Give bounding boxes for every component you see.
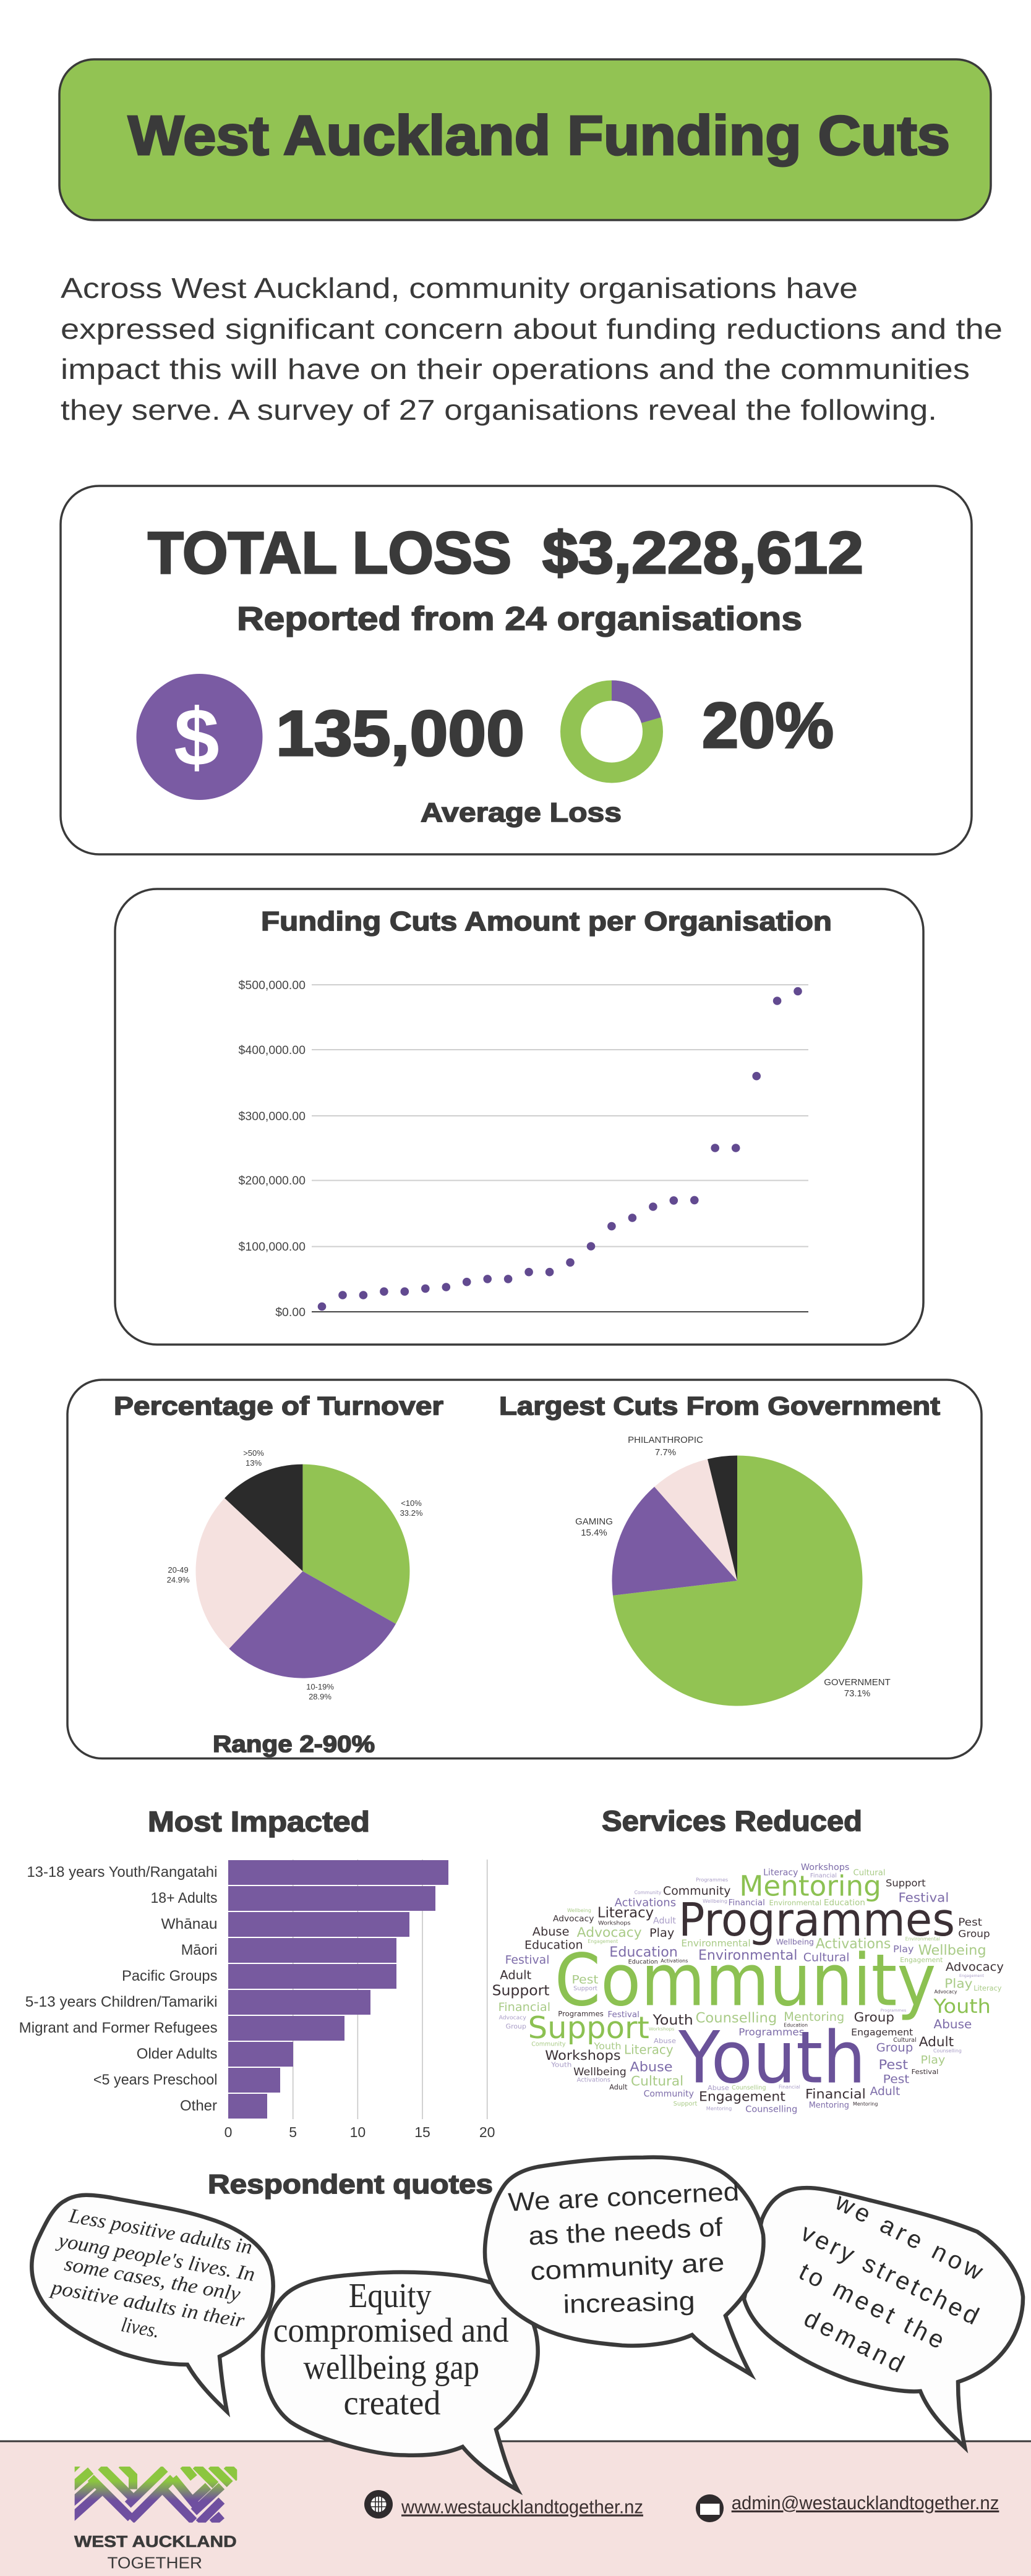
word cloud: services reduced: Youth: [652, 2013, 693, 2028]
word cloud: services reduced: Financial: [729, 1898, 765, 1908]
word cloud: services reduced: Festival: [505, 1954, 549, 1967]
reported from caption: Reported from 24 organisations: [237, 600, 802, 637]
bar chart: most impacted: 10: [350, 2124, 366, 2140]
word cloud: services reduced: Support: [528, 2010, 649, 2046]
pie chart: percentage of turnover: >50%: [243, 1448, 264, 1458]
speech bubble: very stretched: demand: [800, 2305, 909, 2378]
pie chart: largest cuts: GAMING: [575, 1516, 613, 1527]
word cloud: services reduced: Adult: [500, 1968, 532, 1982]
word cloud: services reduced: Education: [824, 1898, 865, 1908]
logo: West Auckland Together: TOGETHER: [108, 2553, 202, 2572]
word cloud: services reduced: Engagement: [959, 1974, 984, 1978]
panel: funding cuts scatter chart: [115, 889, 923, 1345]
word cloud: services reduced: Group: [876, 2041, 913, 2054]
pie chart: percentage of turnover: 24.9%: [167, 1575, 190, 1584]
word cloud: services reduced: Financial: [805, 2086, 866, 2102]
bar chart: most impacted: 5-13 years Children/Tamariki: [25, 1994, 218, 2010]
word cloud: services reduced: Environmental: [698, 1948, 797, 1963]
word cloud: services reduced: Counselling: [745, 2105, 797, 2115]
title banner: [59, 59, 991, 220]
word cloud: services reduced: Mentoring: [809, 2101, 849, 2110]
speech bubble: equity compromised: wellbeing gap: [303, 2349, 479, 2387]
word cloud: services reduced: Cultural: [803, 1951, 850, 1965]
word cloud: services reduced: Support: [492, 1983, 549, 1999]
email link: admin@westaucklandtogether.nz: [732, 2492, 999, 2514]
intro paragraph: expressed significant concern about funding reductions and the: [61, 313, 1003, 345]
word cloud: services reduced: Abuse: [533, 1926, 569, 1939]
website link: www.westaucklandtogether.nz: [401, 2496, 643, 2517]
word cloud: services reduced: Wellbeing: [567, 1908, 591, 1913]
bar chart: most impacted: 15: [414, 2124, 430, 2140]
average loss caption: Average Loss: [421, 797, 622, 828]
pie chart: percentage of turnover: [167, 1448, 423, 1701]
bar chart: most impacted: Whānau: [161, 1916, 218, 1932]
word cloud: services reduced: Literacy: [624, 2043, 674, 2057]
word cloud: services reduced: Engagement: [588, 1939, 618, 1944]
heading: most impacted: Most Impacted: [148, 1805, 370, 1837]
speech bubble: very stretched: [744, 2188, 1023, 2447]
word cloud: services reduced: Engagement: [851, 2026, 913, 2038]
word cloud: services reduced: [492, 1863, 1004, 2115]
range caption: Range 2-90%: [213, 1732, 375, 1758]
word cloud: services reduced: Environmental: [905, 1936, 940, 1942]
word cloud: services reduced: Mentoring: [706, 2106, 732, 2112]
word cloud: services reduced: Advocacy: [946, 1960, 1004, 1974]
word cloud: services reduced: Programmes: [881, 2008, 907, 2013]
word cloud: services reduced: Advocacy: [935, 1989, 957, 1994]
word cloud: services reduced: Activations: [661, 1958, 688, 1963]
word cloud: services reduced: Literacy: [973, 1984, 1002, 1992]
bar chart: most impacted: Pacific Groups: [122, 1968, 218, 1984]
pie chart: largest cuts: 15.4%: [581, 1528, 607, 1538]
word cloud: services reduced: Festival: [607, 2010, 640, 2020]
bar chart: most impacted: 0: [225, 2124, 232, 2140]
word cloud: services reduced: Activations: [816, 1937, 891, 1952]
word cloud: services reduced: Wellbeing: [776, 1938, 814, 1947]
speech bubble: less positive adults: [32, 2195, 273, 2412]
word cloud: services reduced: Programmes: [678, 1894, 955, 1947]
word cloud: services reduced: Play: [920, 2054, 946, 2067]
intro paragraph: Across West Auckland, community organisations have: [61, 272, 858, 304]
icon: dollar coin: $: [174, 692, 220, 783]
word cloud: services reduced: Advocacy: [577, 1925, 642, 1941]
footer band: [0, 2441, 1031, 2576]
panel: pie charts: [67, 1380, 982, 1758]
word cloud: services reduced: Education: [524, 1939, 583, 1952]
speech bubble: very stretched: very stretched: [797, 2219, 983, 2330]
icon: dollar coin: [136, 674, 262, 800]
speech bubble: very stretched: to meet the: [795, 2258, 949, 2354]
word cloud: services reduced: Literacy: [763, 1868, 798, 1878]
percent value: 20%: [702, 690, 834, 762]
total loss amount: $3,228,612: [542, 520, 863, 586]
word cloud: services reduced: Group: [958, 1928, 990, 1940]
word cloud: services reduced: Support: [886, 1877, 926, 1889]
word cloud: services reduced: Support: [573, 1986, 597, 1992]
speech bubble: equity compromised: Equity: [349, 2277, 432, 2315]
word cloud: services reduced: Abuse: [708, 2084, 729, 2092]
pie chart: largest cuts: PHILANTHROPIC: [628, 1435, 703, 1445]
word cloud: services reduced: Wellbeing: [918, 1943, 986, 1958]
word cloud: services reduced: Literacy: [597, 1905, 654, 1921]
chart heading: Funding Cuts Amount per Organisation: [261, 906, 832, 937]
intro paragraph: impact this will have on their operations and the communities: [61, 353, 970, 385]
word cloud: services reduced: Environmental: [681, 1937, 751, 1949]
word cloud: services reduced: Advocacy: [499, 2015, 526, 2021]
scatter points: [318, 987, 802, 1311]
word cloud: services reduced: Workshops: [801, 1863, 849, 1872]
word cloud: services reduced: Activations: [577, 2077, 610, 2084]
word cloud: services reduced: Education: [784, 2022, 808, 2028]
word cloud: services reduced: Adult: [870, 2085, 900, 2098]
word cloud: services reduced: Financial: [498, 2001, 550, 2014]
word cloud: services reduced: Pest: [958, 1916, 982, 1929]
pie chart: percentage of turnover: 28.9%: [309, 1692, 332, 1701]
word cloud: services reduced: Advocacy: [553, 1915, 594, 1924]
speech bubble: less positive adults: some cases, the only: [62, 2253, 242, 2306]
word cloud: services reduced: Cultural: [631, 2074, 683, 2089]
word cloud: services reduced: Youth: [678, 2016, 866, 2099]
word cloud: services reduced: Youth: [550, 2060, 571, 2068]
y axis and gridlines: $200,000.00: [239, 1174, 306, 1188]
pie chart: largest cuts: 73.1%: [844, 1688, 870, 1699]
word cloud: services reduced: Abuse: [630, 2060, 673, 2075]
word cloud: services reduced: Counselling: [696, 2010, 777, 2026]
word cloud: services reduced: Community: [555, 1939, 936, 2022]
word cloud: services reduced: Pest: [878, 2057, 908, 2072]
speech bubble: less positive adults: positive adults in their: [48, 2276, 246, 2332]
bar chart: most impacted: Other: [180, 2098, 217, 2114]
word cloud: services reduced: Workshops: [649, 2026, 675, 2031]
word cloud: services reduced: Pest: [571, 1973, 599, 1986]
speech bubble: equity compromised: created: [344, 2384, 440, 2423]
panel: total loss: [61, 486, 972, 854]
bar chart: most impacted: Older Adults: [137, 2046, 218, 2062]
word cloud: services reduced: Festival: [912, 2068, 938, 2076]
word cloud: services reduced: Activations: [615, 1897, 676, 1909]
y axis and gridlines: $100,000.00: [239, 1240, 306, 1254]
word cloud: services reduced: Group: [854, 2010, 894, 2025]
speech bubble: less positive adults: lives.: [119, 2314, 161, 2342]
speech bubble: very stretched: we are now: [831, 2188, 987, 2285]
word cloud: services reduced: Pest: [883, 2073, 909, 2086]
word cloud: services reduced: Engagement: [699, 2089, 785, 2105]
word cloud: services reduced: Cultural: [893, 2037, 917, 2044]
heading: percentage of turnover: Percentage of Turnover: [114, 1391, 443, 1421]
icon: globe: [364, 2490, 393, 2519]
word cloud: services reduced: Festival: [898, 1890, 949, 1905]
heading: respondent quotes: Respondent quotes: [208, 2169, 493, 2200]
word cloud: services reduced: Programmes: [738, 2026, 804, 2038]
word cloud: services reduced: Mentoring: [739, 1870, 881, 1903]
word cloud: services reduced: Adult: [919, 2034, 954, 2050]
word cloud: services reduced: Community: [635, 1890, 662, 1895]
word cloud: services reduced: Play: [649, 1927, 675, 1940]
bar chart: most impacted: <5 years Preschool: [93, 2072, 218, 2088]
average loss value: 135,000: [276, 698, 524, 770]
y axis and gridlines: $500,000.00: [239, 979, 306, 992]
intro paragraph: they serve. A survey of 27 organisations reveal the following.: [61, 394, 937, 426]
pie chart: percentage of turnover: 20-49: [168, 1565, 189, 1575]
total loss heading: TOTAL LOSS: [148, 520, 511, 586]
pie chart: percentage of turnover: <10%: [401, 1498, 422, 1508]
bar chart: most impacted: 20: [479, 2124, 495, 2140]
word cloud: services reduced: Programmes: [558, 2010, 604, 2018]
word cloud: services reduced: Environmental: [769, 1898, 821, 1907]
logo mark: [74, 2467, 237, 2523]
y axis and gridlines: $0.00: [275, 1306, 306, 1319]
word cloud: services reduced: Community: [531, 2041, 566, 2047]
intro paragraph: [61, 272, 1003, 426]
heading: services reduced: Services Reduced: [602, 1805, 862, 1837]
word cloud: services reduced: Support: [674, 2101, 698, 2107]
word cloud: services reduced: Engagement: [900, 1956, 943, 1964]
word cloud: services reduced: Abuse: [934, 2017, 972, 2031]
title banner: West Auckland Funding Cuts: [128, 105, 950, 167]
word cloud: services reduced: Mentoring: [853, 2101, 878, 2107]
pie chart: largest cuts: [575, 1435, 891, 1706]
pie chart: largest cuts: GOVERNMENT: [824, 1677, 891, 1688]
word cloud: services reduced: Financial: [810, 1872, 837, 1879]
bar chart: most impacted: 13-18 years Youth/Rangatahi: [27, 1864, 217, 1881]
word cloud: services reduced: Play: [893, 1944, 914, 1955]
word cloud: services reduced: Adult: [653, 1916, 676, 1926]
bar chart: most impacted: 18+ Adults: [151, 1890, 218, 1906]
word cloud: services reduced: Financial: [779, 2084, 800, 2089]
word cloud: services reduced: Workshops: [598, 1920, 631, 1926]
y axis and gridlines: $400,000.00: [239, 1044, 306, 1057]
word cloud: services reduced: Abuse: [654, 2037, 676, 2045]
bar chart: most impacted: 5: [289, 2124, 297, 2140]
speech bubble: we are concerned: We are concerned: [507, 2177, 740, 2217]
speech bubble: we are concerned: [485, 2157, 764, 2374]
word cloud: services reduced: Play: [944, 1976, 972, 1991]
word cloud: services reduced: Programmes: [696, 1877, 728, 1883]
word cloud: services reduced: Group: [506, 2023, 526, 2031]
pie chart: largest cuts: 7.7%: [655, 1447, 676, 1458]
icon: mail: [696, 2494, 724, 2522]
speech bubble: equity compromised: compromised and: [273, 2311, 509, 2350]
word cloud: services reduced: Youth: [593, 2041, 622, 2052]
logo: West Auckland Together: WEST AUCKLAND: [74, 2532, 237, 2551]
pie chart: percentage of turnover: 10-19%: [306, 1682, 334, 1691]
pie chart: percentage of turnover: 13%: [246, 1458, 262, 1468]
word cloud: services reduced: Adult: [609, 2083, 628, 2091]
speech bubble: we are concerned: increasing: [563, 2286, 695, 2319]
word cloud: services reduced: Counselling: [933, 2048, 962, 2054]
word cloud: services reduced: Wellbeing: [703, 1898, 727, 1904]
bar chart: most impacted: Migrant and Former Refugees: [19, 2020, 218, 2036]
speech bubble: equity compromised: [263, 2272, 538, 2490]
logo: West Auckland Together: [74, 2467, 237, 2569]
speech bubble: we are concerned: as the needs of: [528, 2213, 724, 2250]
word cloud: services reduced: Wellbeing: [573, 2066, 627, 2078]
word cloud: services reduced: Counselling: [732, 2085, 766, 2091]
word cloud: services reduced: Education: [628, 1958, 658, 1965]
bar chart: most impacted: Māori: [181, 1942, 218, 1958]
heading: largest cuts: Largest Cuts From Government: [499, 1391, 940, 1421]
bar chart: most impacted: [19, 1860, 495, 2140]
word cloud: services reduced: Cultural: [853, 1868, 886, 1878]
speech bubble: less positive adults: young people's lives. In: [54, 2229, 257, 2286]
donut chart: 20 percent: [570, 691, 653, 773]
word cloud: services reduced: Education: [609, 1945, 678, 1960]
word cloud: services reduced: Youth: [933, 1996, 991, 2018]
y axis and gridlines: [239, 979, 808, 1319]
speech bubble: we are concerned: community are: [529, 2248, 725, 2285]
word cloud: services reduced: Community: [644, 2089, 694, 2099]
y axis and gridlines: $300,000.00: [239, 1110, 306, 1123]
pie chart: percentage of turnover: 33.2%: [400, 1508, 423, 1518]
speech bubble: less positive adults: Less positive adults in: [67, 2204, 254, 2259]
word cloud: services reduced: Mentoring: [784, 2010, 844, 2024]
word cloud: services reduced: Community: [663, 1884, 731, 1898]
word cloud: services reduced: Workshops: [545, 2048, 621, 2064]
